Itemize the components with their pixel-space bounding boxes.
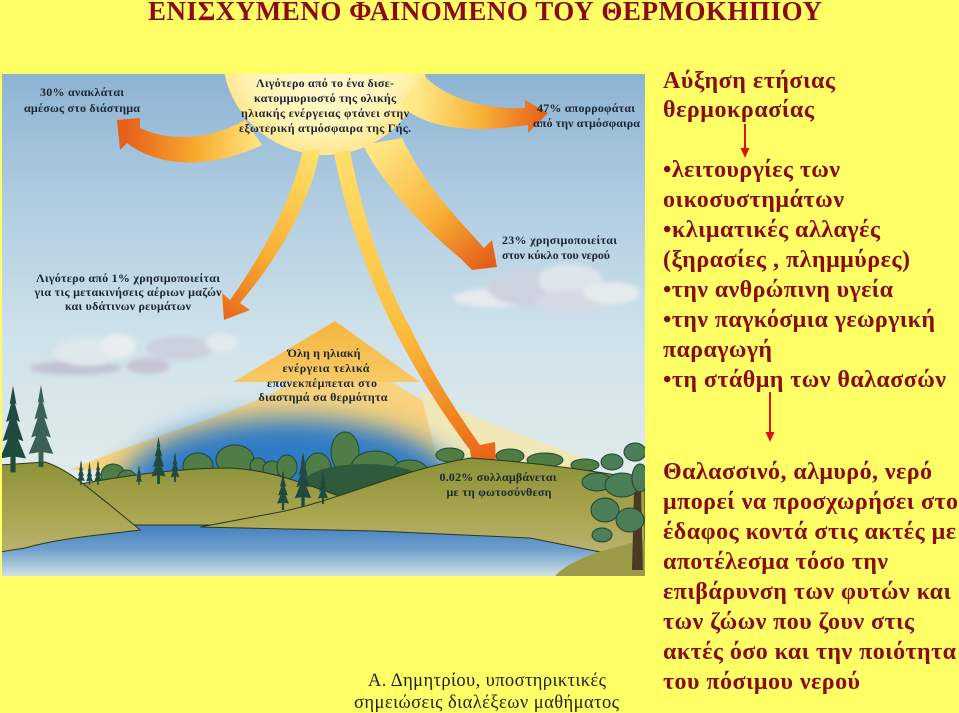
text block: impacts list: •την ανθρώπινη υγεία bbox=[663, 277, 894, 303]
label: 23 percent water cycle bbox=[502, 233, 617, 262]
right hill bbox=[200, 458, 645, 552]
arrow: 30 percent reflected bbox=[117, 118, 262, 163]
text block: salt water intrusion: Θαλασσινό, αλμυρό, νερό bbox=[663, 459, 932, 485]
sun bbox=[224, 74, 426, 155]
label: 23 percent water cycle: στον κύκλο του νερού bbox=[502, 248, 610, 262]
text block: impacts list: •τη στάθμη των θαλασσών bbox=[663, 367, 946, 393]
label: under 1 percent: και υδάτινων ρευμάτων bbox=[65, 299, 192, 313]
cloud: left bbox=[29, 334, 238, 375]
text block: salt water intrusion: έδαφος κοντά στις ακτές με bbox=[663, 519, 956, 545]
label: solar share reaching atmosphere: κατομμυριοστό της ολικής bbox=[254, 91, 397, 105]
arrow: sea level to salt water bbox=[766, 392, 774, 442]
blue glow above hills bbox=[105, 396, 470, 482]
middle hill bbox=[83, 468, 338, 526]
text block: impacts list: •κλιματικές αλλαγές bbox=[663, 217, 881, 243]
label: all energy re-emitted as heat bbox=[258, 346, 388, 404]
label: solar share reaching atmosphere: Λιγότερο από το ένα δισε- bbox=[256, 76, 394, 90]
label: 30 percent reflected: 30% ανακλάται bbox=[40, 85, 124, 99]
label: photosynthesis bbox=[440, 470, 557, 499]
conifer trees bbox=[0, 385, 328, 510]
label: 30 percent reflected: αμέσως στο διάστημα bbox=[24, 101, 140, 115]
label: solar share reaching atmosphere: ηλιακής ενέργειας φτάνει στην bbox=[241, 106, 410, 120]
label: 47 percent absorbed: 47% απορροφάται bbox=[537, 101, 635, 115]
broadleaf tree right bbox=[582, 443, 648, 570]
source credit: Α. Δημητρίου, υποστηρικτικές bbox=[368, 671, 607, 691]
label: photosynthesis: 0.02% συλλαμβάνεται bbox=[440, 470, 557, 484]
left hill bbox=[0, 462, 140, 552]
source credit: σημειώσεις διαλέξεων μαθήματος bbox=[354, 693, 620, 713]
text block: salt water intrusion: αποτέλεσμα τόσο την bbox=[663, 549, 888, 575]
rising heat fan bbox=[70, 378, 590, 470]
label: 47 percent absorbed bbox=[533, 101, 640, 130]
label: under 1 percent bbox=[34, 271, 222, 313]
label: under 1 percent: Λιγότερο από 1% χρησιμοποιείται bbox=[36, 271, 220, 285]
text block: salt water intrusion: επιβάρυνση των φυτών και bbox=[663, 579, 952, 605]
upward triangle arrow bbox=[233, 321, 420, 382]
label: all energy re-emitted as heat: ενέργεια τελικά bbox=[282, 361, 370, 375]
text block: temperature rise: Αύξηση ετήσιας bbox=[663, 68, 836, 94]
text block: impacts list: παραγωγή bbox=[663, 337, 772, 363]
label: all energy re-emitted as heat: Όλη η ηλιακή bbox=[286, 346, 361, 360]
arrow: 0.02 percent photosynthesis bbox=[334, 150, 496, 465]
label: 47 percent absorbed: από την ατμόσφαιρα bbox=[533, 116, 640, 130]
text block: temperature rise: θερμοκρασίας bbox=[663, 97, 815, 123]
text block: salt water intrusion: μπορεί να προσχωρήσει στο bbox=[663, 489, 958, 515]
cloud: right bbox=[453, 264, 640, 312]
arrow: under 1 percent winds and currents bbox=[222, 150, 320, 320]
sky background bbox=[2, 74, 645, 483]
label: 23 percent water cycle: 23% χρησιμοποιείται bbox=[502, 233, 617, 247]
text block: impacts list bbox=[663, 157, 946, 393]
foreground bank bbox=[555, 540, 645, 576]
text block: salt water intrusion bbox=[663, 459, 958, 695]
label: solar share reaching atmosphere: εξωτερική ατμόσφαιρα της Γής. bbox=[239, 121, 411, 135]
label: 30 percent reflected bbox=[24, 85, 140, 115]
text block: impacts list: (ξηρασίες , πλημμύρες) bbox=[663, 247, 910, 273]
label: all energy re-emitted as heat: διαστημά σα θερμότητα bbox=[258, 390, 388, 404]
text block: impacts list: οικοσυστημάτων bbox=[663, 187, 844, 213]
text block: salt water intrusion: ακτές όσο και την ποιότητα bbox=[663, 639, 957, 665]
source credit bbox=[354, 671, 620, 713]
text block: impacts list: •λειτουργίες των bbox=[663, 157, 840, 183]
arrow: 47 percent absorbed bbox=[400, 74, 548, 133]
text block: temperature rise bbox=[663, 68, 836, 123]
text block: salt water intrusion: των ζώων που ζουν στις bbox=[663, 609, 915, 635]
arrow: 23 percent water cycle bbox=[363, 138, 497, 270]
dark forest shading bbox=[306, 464, 412, 496]
label: all energy re-emitted as heat: επανεκπέμπεται στο bbox=[267, 376, 377, 390]
text block: salt water intrusion: του πόσιμου νερού bbox=[663, 669, 860, 695]
label: photosynthesis: με τη φωτοσύνθεση bbox=[446, 485, 552, 499]
panel: greenhouse energy balance illustration bbox=[2, 74, 645, 576]
pale right side of fan bbox=[420, 390, 585, 466]
lake bbox=[2, 526, 599, 576]
label: under 1 percent: για τις μετακινήσεις αέριων μαζών bbox=[34, 285, 222, 299]
arrow: temperature to impacts bbox=[740, 124, 750, 158]
far bushes bbox=[100, 432, 600, 480]
label: solar share reaching atmosphere bbox=[239, 76, 411, 135]
text block: impacts list: •την παγκόσμια γεωργική bbox=[663, 307, 935, 333]
